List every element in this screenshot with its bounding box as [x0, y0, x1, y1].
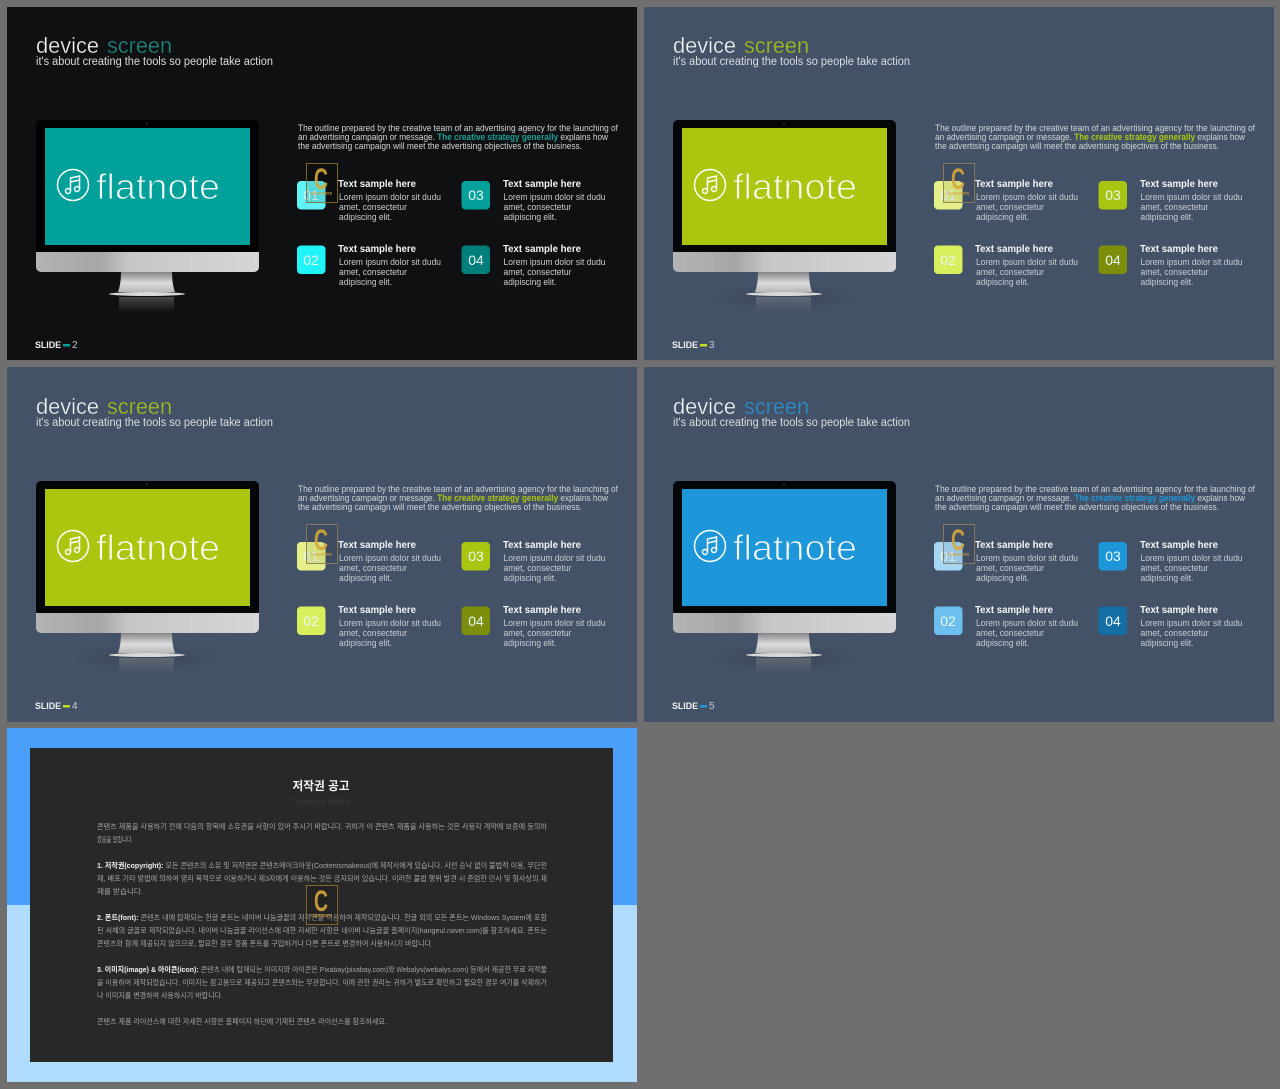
item 01: Lorem ipsum dolor sit dudu	[339, 553, 441, 563]
watermark: C	[314, 163, 328, 196]
watermark	[306, 163, 338, 202]
intro text: 콘텐츠 제품을 사용하기 전에 다음의 항목에 소유권을 사항이 있어 주시기 바랍니다. 귀하가 이 콘텐츠 제품을 사용하는 것은 사용자 계약에 보증에 동의하	[97, 821, 547, 831]
watermark: CONTENTS	[310, 913, 332, 918]
item 01: Text sample here	[975, 179, 1053, 190]
logo text: flatnote	[733, 527, 857, 568]
intro paragraph	[298, 123, 619, 151]
item 02: Text sample here	[338, 244, 416, 255]
heading: screen	[107, 394, 172, 419]
watermark: CONTENTS	[310, 552, 332, 557]
slide number: SLIDE	[672, 340, 698, 350]
monitor	[673, 120, 896, 312]
heading: device	[673, 33, 736, 58]
heading: device	[673, 394, 736, 419]
item 02: amet, consectetur	[339, 267, 407, 277]
intro paragraph: an advertising campaign or message. The creative strategy generally explains how	[935, 132, 1246, 142]
section 2: font: 2. 폰트(font): 콘텐츠 내에 탑재되는 한글 폰트는 네이버 나눔글꼴의 저작권을 이용하여 제작되었습니다. 한글 외의 모든 폰트는 Windows System에 포함	[97, 912, 547, 922]
item 04: Text sample here	[503, 244, 581, 255]
section 1: copyright	[97, 860, 547, 896]
watermark	[306, 524, 338, 564]
item 03	[1098, 179, 1243, 222]
heading: screen	[107, 33, 172, 58]
background top band	[7, 728, 637, 905]
watermark: C	[951, 163, 965, 196]
watermark	[306, 885, 338, 924]
item 01: adipiscing elit.	[976, 212, 1029, 222]
item 02: Text sample here	[975, 605, 1053, 616]
slide number: SLIDE	[35, 340, 61, 350]
intro text	[97, 821, 547, 844]
intro paragraph: the advertising campaign will meet the advertising objectives of the business.	[935, 502, 1219, 512]
monitor	[36, 481, 259, 673]
item 01: amet, consectetur	[339, 563, 407, 573]
item 02: Lorem ipsum dolor sit dudu	[976, 618, 1078, 628]
item 01	[297, 540, 441, 583]
watermark: CONTENTS	[947, 191, 969, 196]
slide background	[644, 7, 1274, 360]
slide number: SLIDE	[672, 701, 698, 711]
heading	[36, 33, 172, 58]
item 01: Text sample here	[338, 540, 416, 551]
item 01: Lorem ipsum dolor sit dudu	[339, 192, 441, 202]
item 02	[297, 244, 441, 287]
item 04: Lorem ipsum dolor sit dudu	[504, 618, 606, 628]
subtitle: it's about creating the tools so people take action	[36, 56, 273, 68]
item 02: adipiscing elit.	[976, 638, 1029, 648]
item 02: Text sample here	[338, 605, 416, 616]
slide number	[672, 701, 715, 712]
closing note: 콘텐츠 제품 라이선스에 대한 자세한 사항은 홈페이지 하단에 기재된 콘텐츠 라이선스를 참조하세요.	[97, 1016, 387, 1026]
item 04: amet, consectetur	[504, 628, 572, 638]
item 01: amet, consectetur	[339, 202, 407, 212]
item 02: 02	[303, 613, 319, 629]
item 04	[462, 605, 606, 648]
item 02	[297, 605, 441, 648]
item 02: amet, consectetur	[339, 628, 407, 638]
item 04: Lorem ipsum dolor sit dudu	[1140, 257, 1243, 267]
item 03: 03	[1105, 187, 1121, 203]
heading: screen	[744, 33, 809, 58]
item 03: Lorem ipsum dolor sit dudu	[1140, 553, 1243, 563]
item 04: adipiscing elit.	[504, 638, 556, 648]
item 01: amet, consectetur	[976, 563, 1044, 573]
intro paragraph: an advertising campaign or message. The creative strategy generally explains how	[298, 493, 609, 503]
item 03: adipiscing elit.	[504, 573, 556, 583]
icon: music note	[58, 530, 88, 562]
item 02	[934, 244, 1078, 287]
watermark	[944, 524, 974, 564]
slide number: 4	[72, 701, 78, 712]
panel: copyright notice	[7, 728, 637, 1082]
item 01: Text sample here	[338, 179, 416, 190]
item 03: amet, consectetur	[1140, 563, 1209, 573]
logo text: flatnote	[733, 166, 857, 207]
item 04	[462, 244, 606, 287]
item 03	[462, 540, 606, 583]
section 1: copyright: 1. 저작권(copyright): 모든 콘텐츠의 소유 및 저작권은 콘텐츠메이크아웃(Contentsmakeout)에 제작사에게 있습니다. 사전 승낙 없이 불법적 이용, 무단전	[97, 860, 547, 870]
item 01	[934, 179, 1078, 222]
item 03: Text sample here	[1140, 540, 1218, 551]
item 04: 04	[1105, 613, 1121, 629]
heading: screen	[744, 394, 809, 419]
item 04: 04	[1105, 252, 1121, 268]
panel: slide 2 black teal	[7, 7, 637, 360]
watermark: CONTENTS	[310, 191, 332, 196]
item 03: amet, consectetur	[504, 563, 572, 573]
notice subtitle: Copyright Notice	[291, 797, 352, 806]
intro text: 였음을 알립니다.	[97, 834, 133, 844]
heading	[36, 394, 172, 419]
item 01: amet, consectetur	[976, 202, 1044, 212]
intro paragraph: the advertising campaign will meet the advertising objectives of the business.	[935, 141, 1219, 151]
slide number	[672, 340, 715, 351]
item 04: amet, consectetur	[1140, 628, 1209, 638]
dark card	[30, 748, 613, 1062]
item 03: amet, consectetur	[1140, 202, 1209, 212]
logo text: flatnote	[96, 166, 220, 207]
item 03: 03	[468, 548, 484, 564]
item 01: Lorem ipsum dolor sit dudu	[976, 553, 1078, 563]
subtitle: it's about creating the tools so people take action	[673, 56, 910, 68]
item 02	[934, 605, 1078, 648]
heading	[673, 394, 809, 419]
watermark	[944, 163, 974, 202]
item 03: Text sample here	[503, 179, 581, 190]
panel: slide 5 slate blue	[644, 367, 1274, 722]
monitor	[673, 481, 896, 673]
slide background	[7, 7, 637, 360]
item 04: Text sample here	[503, 605, 581, 616]
item 03: 03	[1105, 548, 1121, 564]
item 02: amet, consectetur	[976, 628, 1044, 638]
intro paragraph	[935, 484, 1256, 512]
intro paragraph: The outline prepared by the creative team of an advertising agency for the launching of	[935, 123, 1256, 133]
icon: music note	[694, 530, 726, 562]
item 03: adipiscing elit.	[1140, 573, 1194, 583]
section 2: font	[97, 912, 547, 948]
item 03: amet, consectetur	[504, 202, 572, 212]
item 03: Lorem ipsum dolor sit dudu	[504, 192, 606, 202]
slide number	[35, 340, 78, 351]
intro paragraph: The outline prepared by the creative team of an advertising agency for the launching of	[298, 484, 619, 494]
logo text: flatnote	[96, 527, 220, 568]
item 03: Lorem ipsum dolor sit dudu	[1140, 192, 1243, 202]
item 01	[297, 179, 441, 222]
item 03: adipiscing elit.	[1140, 212, 1194, 222]
watermark: CONTENTS	[947, 552, 969, 557]
item 01: 01	[940, 187, 956, 203]
item 01: adipiscing elit.	[976, 573, 1029, 583]
intro paragraph: The outline prepared by the creative team of an advertising agency for the launching of	[298, 123, 619, 133]
watermark: C	[951, 524, 965, 557]
item 02: adipiscing elit.	[339, 277, 392, 287]
monitor	[36, 120, 259, 312]
item 04: amet, consectetur	[1140, 267, 1209, 277]
slide number: 2	[72, 340, 78, 351]
item 02: Text sample here	[975, 244, 1053, 255]
item 03: Text sample here	[1140, 179, 1218, 190]
intro paragraph: an advertising campaign or message. The creative strategy generally explains how	[298, 132, 609, 142]
item 01: 01	[303, 187, 319, 203]
item 03	[1098, 540, 1243, 583]
slide number: 5	[709, 701, 715, 712]
slide number: 3	[709, 340, 715, 351]
item 03	[462, 179, 606, 222]
icon: music note	[58, 170, 88, 200]
intro paragraph: the advertising campaign will meet the advertising objectives of the business.	[298, 502, 582, 512]
item 02: adipiscing elit.	[976, 277, 1029, 287]
slide background	[7, 367, 637, 722]
section 3: image and icon: 3. 이미지(image) & 아이콘(icon): 콘텐츠 내에 탑재되는 이미지와 아이콘은 Pixabay(pixabay.com)와 Webalys(webalys.com) 등에서 제공한 무료 저작물	[97, 964, 547, 974]
slide number: SLIDE	[35, 701, 61, 711]
item 01	[934, 540, 1078, 583]
item 04: 04	[468, 252, 484, 268]
item 04: 04	[468, 613, 484, 629]
panel: slide 4 slate green	[7, 367, 637, 722]
item 02: 02	[940, 252, 956, 268]
item 02: Lorem ipsum dolor sit dudu	[339, 618, 441, 628]
item 04: Text sample here	[1140, 605, 1218, 616]
item 04: Lorem ipsum dolor sit dudu	[504, 257, 606, 267]
item 04: Text sample here	[1140, 244, 1218, 255]
heading	[673, 33, 809, 58]
section 2: font: 콘텐츠와 함께 제공되지 않으므로, 필요한 경우 정품 폰트를 구입하거나 다른 폰트로 변경하여 사용하시기 바랍니다.	[97, 938, 433, 948]
item 02: Lorem ipsum dolor sit dudu	[976, 257, 1078, 267]
item 02: amet, consectetur	[976, 267, 1044, 277]
item 04	[1098, 605, 1243, 648]
intro paragraph: The outline prepared by the creative team of an advertising agency for the launching of	[935, 484, 1256, 494]
item 04: adipiscing elit.	[1140, 638, 1194, 648]
section 2: font: 된 서체의 글꼴로 제작되었습니다. 네이버 나눔글꼴 라이선스에 대한 자세한 사항은 네이버 나눔글꼴 홈페이지(hangeul.naver.com)를 참조하세요. 폰트는	[97, 925, 547, 935]
item 01: 01	[940, 548, 956, 564]
intro paragraph	[298, 484, 619, 512]
item 01: adipiscing elit.	[339, 573, 392, 583]
item 04: amet, consectetur	[504, 267, 572, 277]
item 02: 02	[940, 613, 956, 629]
watermark: C	[314, 885, 328, 918]
heading: device	[36, 33, 99, 58]
item 01: Lorem ipsum dolor sit dudu	[976, 192, 1078, 202]
item 04: Lorem ipsum dolor sit dudu	[1140, 618, 1243, 628]
slide number	[35, 701, 78, 712]
item 04	[1098, 244, 1243, 287]
section 3: image and icon: 을 이용하여 제작되었습니다. 이미지는 참고용으로 제공되고 콘텐츠와는 무관합니다. 이에 관한 권리는 귀하가 별도로 확인하고 필요한 경우 여기를 삭제하거	[97, 977, 547, 987]
item 02: Lorem ipsum dolor sit dudu	[339, 257, 441, 267]
slide background	[644, 367, 1274, 722]
item 03: adipiscing elit.	[504, 212, 556, 222]
icon: music note	[694, 170, 726, 200]
item 03: 03	[468, 187, 484, 203]
item 01: 01	[303, 548, 319, 564]
background bottom band	[7, 905, 637, 1082]
notice title: 저작권 공고	[292, 778, 350, 793]
section 3: image and icon: 나 이미지를 변경하여 사용하시기 바랍니다.	[97, 990, 223, 1000]
panel: slide 3 slate green	[644, 7, 1274, 360]
item 04: adipiscing elit.	[504, 277, 556, 287]
item 02: adipiscing elit.	[339, 638, 392, 648]
section 3: image and icon	[97, 964, 547, 1000]
item 02: 02	[303, 252, 319, 268]
watermark: C	[314, 524, 328, 557]
intro paragraph: the advertising campaign will meet the advertising objectives of the business.	[298, 141, 582, 151]
intro paragraph	[935, 123, 1256, 151]
intro paragraph: an advertising campaign or message. The creative strategy generally explains how	[935, 493, 1246, 503]
item 01: Text sample here	[975, 540, 1053, 551]
item 04: adipiscing elit.	[1140, 277, 1194, 287]
section 1: copyright: 재, 배포 기타 방법에 의하여 영리 목적으로 이용하거나 제3자에게 이용하는 것은 금지되어 있습니다. 이러한 불법 행위 발견 시 준엄한 민사 및 형사상의 제	[97, 873, 547, 883]
subtitle: it's about creating the tools so people take action	[36, 417, 273, 429]
heading: device	[36, 394, 99, 419]
subtitle: it's about creating the tools so people take action	[673, 417, 910, 429]
item 03: Lorem ipsum dolor sit dudu	[504, 553, 606, 563]
item 03: Text sample here	[503, 540, 581, 551]
section 1: copyright: 재를 받습니다.	[97, 886, 143, 896]
item 01: adipiscing elit.	[339, 212, 392, 222]
